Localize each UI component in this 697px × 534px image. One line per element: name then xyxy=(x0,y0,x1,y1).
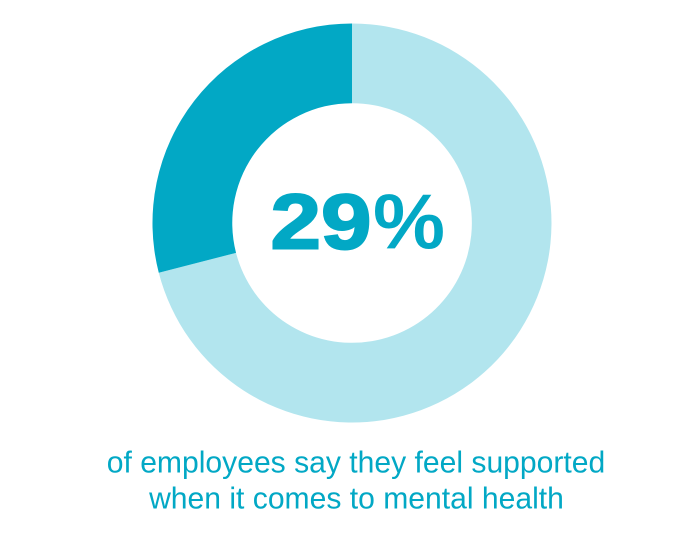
donut remainder segment xyxy=(159,24,551,422)
caption text: when it comes to mental health xyxy=(148,482,564,516)
caption text xyxy=(107,446,605,516)
big percentage value: 29 xyxy=(270,178,372,266)
donut chart: 29 percent xyxy=(152,24,551,422)
caption text: of employees say they feel supported xyxy=(107,446,605,480)
donut highlighted segment xyxy=(152,24,352,273)
big percentage value: % xyxy=(373,178,445,266)
big percentage value xyxy=(270,178,445,266)
